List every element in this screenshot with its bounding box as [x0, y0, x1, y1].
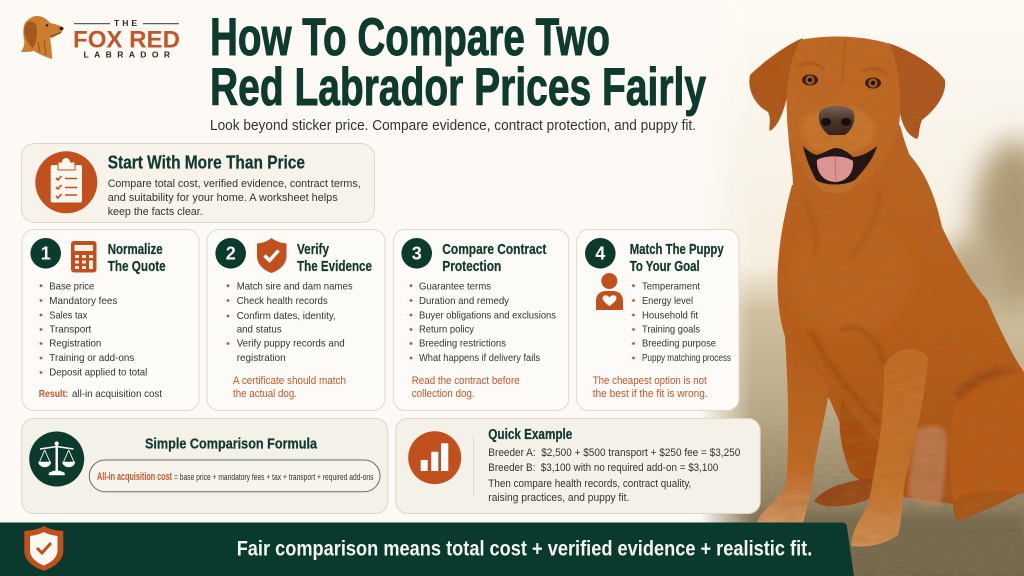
checklist: Temperament: [642, 280, 700, 292]
heading: [442, 241, 546, 275]
open mouth: [803, 146, 877, 184]
panel: quick example: [396, 418, 760, 514]
checklist: Training goals: [642, 324, 700, 336]
note: the actual dog.: [233, 388, 297, 400]
icon: clipboard checklist: [35, 151, 97, 213]
banner text: Fair comparison means total cost + verified evidence + realistic fit.: [237, 538, 812, 561]
icon: shield check: [257, 238, 286, 273]
checklist: and status: [237, 324, 282, 336]
heading: Verify: [297, 241, 330, 258]
checklist: Base price: [49, 280, 94, 292]
checklist: Guarantee terms: [419, 280, 491, 292]
left front leg: [757, 335, 829, 526]
checklist: Sales tax: [49, 310, 88, 322]
panel: start with more than price: [22, 144, 374, 222]
checklist: Return policy: [419, 324, 475, 336]
number badge 4: 4: [595, 244, 605, 264]
brows: [798, 63, 888, 76]
note: A certificate should match: [233, 375, 346, 387]
logo text: the: [74, 18, 179, 28]
title: Red Labrador Prices Fairly: [210, 58, 706, 117]
dog photo illustration: [749, 37, 1024, 547]
checklist: Mandatory fees: [49, 295, 117, 307]
formula pill: [89, 460, 380, 492]
note: Read the contract before: [412, 375, 520, 387]
heading: Normalize: [108, 241, 163, 258]
checklist: Match sire and dam names: [237, 280, 353, 292]
nose: [819, 106, 854, 135]
example text: Then compare health records, contract quality,: [488, 478, 691, 490]
logo text: fox red: FOX RED: [73, 26, 180, 53]
heading: The Quote: [108, 258, 166, 275]
number badge 3: 3: [412, 244, 422, 264]
icon: bar chart: [408, 431, 461, 484]
formula pill: = base price + mandatory fees + tax + transport + required add-ons: [174, 472, 374, 483]
body text: [108, 178, 361, 218]
panel: step 3: [393, 230, 569, 410]
number badge 2: 2: [226, 244, 236, 264]
neck shadows: [806, 190, 880, 258]
title: [210, 8, 706, 117]
checklist: Duration and remedy: [419, 295, 510, 307]
forehead crease: [842, 38, 846, 85]
checklist: Confirm dates, identity,: [237, 310, 336, 322]
left ear: [749, 38, 803, 131]
checklist: [40, 280, 147, 378]
number badge 4: [585, 238, 616, 269]
logo dog head: [21, 16, 64, 59]
body text: and suitability for your home. A worksheet helps: [108, 192, 338, 204]
heading: [297, 241, 372, 275]
example text: Breeder B: $3,100 with no required add-on = $3,100: [488, 462, 718, 474]
heading: To Your Goal: [630, 258, 700, 275]
panel: simple comparison formula: [22, 418, 388, 514]
checklist: Breeding restrictions: [419, 338, 506, 350]
example text: [488, 447, 740, 504]
neck: [788, 125, 936, 220]
icon: shield badge: [24, 526, 63, 571]
result: [39, 388, 162, 400]
note: [233, 375, 346, 400]
number badge 2: [215, 238, 246, 269]
checklist: Breeding purpose: [642, 338, 716, 350]
chest: [788, 215, 912, 335]
icon: calculator: [71, 241, 96, 272]
note: collection dog.: [412, 388, 475, 400]
haunch: [950, 368, 1024, 505]
checklist: Deposit applied to total: [49, 366, 147, 378]
icon: balance scales: [29, 432, 84, 486]
checklist: Training or add-ons: [49, 352, 134, 364]
bottom banner: [0, 522, 854, 576]
note: [412, 375, 520, 400]
checklist: [632, 280, 731, 364]
torso: [777, 150, 1024, 505]
checklist: Buyer obligations and exclusions: [419, 310, 556, 322]
logo text: labrador: LABRADOR: [84, 50, 170, 60]
right ear: [888, 43, 945, 139]
checklist: Registration: [49, 338, 101, 350]
checklist: Puppy matching process: [642, 352, 731, 364]
eyes: [802, 74, 881, 88]
haunch crease: [955, 368, 1020, 402]
rear paw right: [953, 491, 1018, 521]
logo text: the: THE: [114, 18, 137, 28]
result: all-in acquisition cost: [72, 388, 162, 400]
heading: Start With More Than Price: [108, 152, 305, 172]
background: [702, 94, 1024, 576]
panel: step 1: [22, 230, 199, 410]
example text: Breeder A: $2,500 + $500 transport + $250 fee = $3,250: [488, 447, 740, 459]
formula pill: All-in acquisition cost: [97, 471, 172, 483]
checklist: [227, 280, 353, 364]
note: [593, 375, 708, 400]
belly: [908, 426, 947, 507]
icon: person with heart: [596, 273, 623, 310]
head: [787, 37, 900, 191]
checklist: [410, 280, 556, 364]
chest fold shadows: [810, 327, 884, 423]
rear paw left: [814, 478, 874, 507]
right front leg: [851, 349, 928, 547]
checklist: Verify puppy records and: [237, 338, 345, 350]
number badge 3: [401, 238, 432, 269]
body text: Compare total cost, verified evidence, contract terms,: [108, 178, 361, 190]
checklist: What happens if delivery fails: [419, 352, 540, 364]
checklist: Check health records: [237, 295, 328, 307]
muzzle: [800, 106, 876, 154]
title: How To Compare Two: [210, 8, 610, 67]
example text: raising practices, and puppy fit.: [488, 492, 629, 504]
panel: step 4: [577, 230, 739, 410]
logo: [21, 16, 180, 60]
panel: step 2: [207, 230, 385, 410]
subtitle: Look beyond sticker price. Compare evidence, contract protection, and puppy fit.: [210, 118, 696, 134]
checklist: Energy level: [642, 295, 693, 307]
heading: Protection: [442, 258, 501, 275]
chin: [815, 178, 857, 194]
number badge 1: 1: [41, 244, 51, 264]
note: the best if the fit is wrong.: [593, 388, 708, 400]
note: The cheapest option is not: [593, 375, 707, 387]
example heading: Quick Example: [488, 427, 572, 443]
heading: [630, 241, 724, 275]
hind leg shadow: [840, 400, 882, 492]
body text: keep the facts clear.: [108, 206, 203, 218]
heading: The Evidence: [297, 258, 372, 275]
heading: Match The Puppy: [630, 241, 724, 258]
heading: [108, 241, 166, 275]
result: Result:: [39, 388, 68, 400]
heading: Compare Contract: [442, 241, 546, 258]
checklist: Household fit: [642, 310, 698, 322]
number badge 1: [30, 238, 61, 269]
checklist: registration: [237, 352, 286, 364]
formula heading: Simple Comparison Formula: [145, 436, 318, 452]
checklist: Transport: [49, 324, 91, 336]
